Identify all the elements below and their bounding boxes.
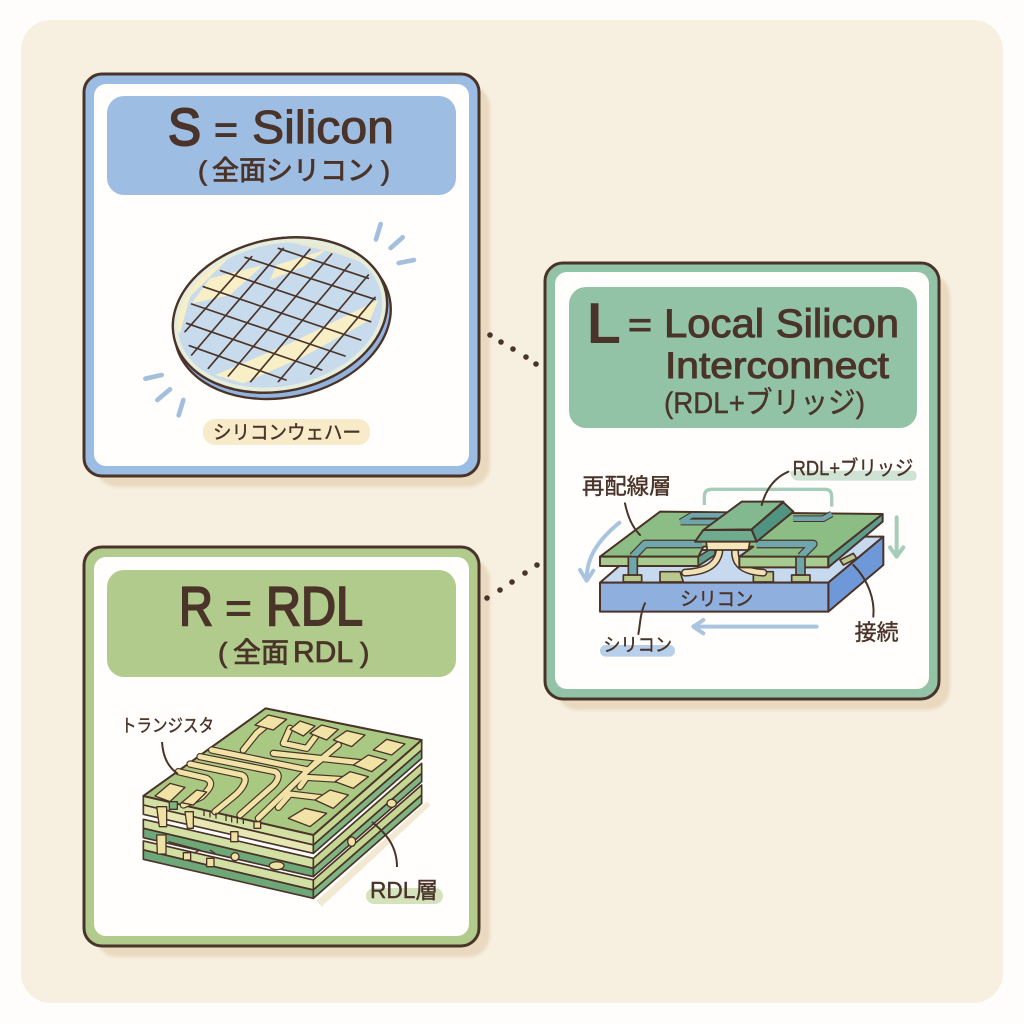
teal traces [633,514,832,557]
diagram labels: RDL+ブリッジ [793,456,913,480]
heading: L = Local Silicon Interconnect [569,287,917,428]
diagram: RDL plus bridge on silicon [580,456,917,657]
heading: R = RDL: R [179,575,213,637]
arrows [580,517,903,633]
leader: RDL layer [372,822,397,867]
connector dots: silicon to local silicon interconnect [487,332,539,367]
heading: R = RDL: 全面 [233,637,289,668]
heading: R = RDL: ( [218,637,228,668]
pads [155,715,405,827]
plate top [600,512,883,557]
diagram labels: シリコン [680,590,753,611]
heading: L = Local Silicon Interconnect: (RDL+ブリッジ) [664,387,865,420]
leader lines [625,472,874,634]
diagram labels: シリコン [603,634,672,655]
heading: S = Silicon: = [214,108,238,152]
pillars [628,557,805,575]
front edge ticks [168,810,243,853]
heading: L = Local Silicon Interconnect: Local Silicon [664,302,899,346]
heading: S = Silicon: 全面シリコン [212,156,374,186]
plate fronts [600,557,698,566]
heading: R = RDL: RDL [293,636,353,669]
diagram labels [582,456,913,655]
diagram labels: 接続 [855,620,899,645]
layer 1 sides [143,796,313,845]
heading: L = Local Silicon Interconnect: L [587,292,620,354]
label: transistor: トランジスタ [121,716,214,736]
bridge pad [706,541,750,550]
label pills [790,471,917,481]
leader: transistor [162,742,178,774]
chart: stacked RDL layers [143,708,431,907]
label: silicon wafer: シリコンウェハー [213,422,361,444]
panel: L = Local Silicon Interconnect [545,263,950,710]
sparkle marks [145,224,414,415]
vias [157,799,396,870]
heading: S = Silicon: Silicon [252,101,394,153]
silicon base [600,537,883,583]
layer 2 [143,763,422,877]
heading: R = RDL: = [225,584,252,633]
heading: S = Silicon: S [168,99,201,157]
heading: L = Local Silicon Interconnect: = [628,304,652,345]
top surface [143,708,422,835]
panel: R = RDL [84,547,490,957]
heading: R = RDL: ) [360,637,369,668]
bracket [704,489,832,507]
layer 3 [143,785,422,898]
shadow [317,802,431,907]
heading: R = RDL [107,570,456,677]
wafer grid [185,248,375,382]
heading: L = Local Silicon Interconnect: Interconnect [665,345,890,386]
diagram labels: 再配線層 [582,474,671,499]
icon: silicon wafer [145,218,414,418]
bridge legs [685,552,763,573]
label: RDL layer: RDL層 [370,877,438,903]
heading: R = RDL: RDL [266,575,363,637]
heading: S = Silicon: ( [198,156,207,186]
bridge [695,530,757,542]
heading: S = Silicon [107,96,456,195]
panel: S = Silicon [84,74,490,487]
connector dots: RDL to local silicon interconnect [484,562,540,601]
trace outlines [178,725,367,818]
contact pads [623,553,857,582]
heading: S = Silicon: ) [381,156,390,186]
